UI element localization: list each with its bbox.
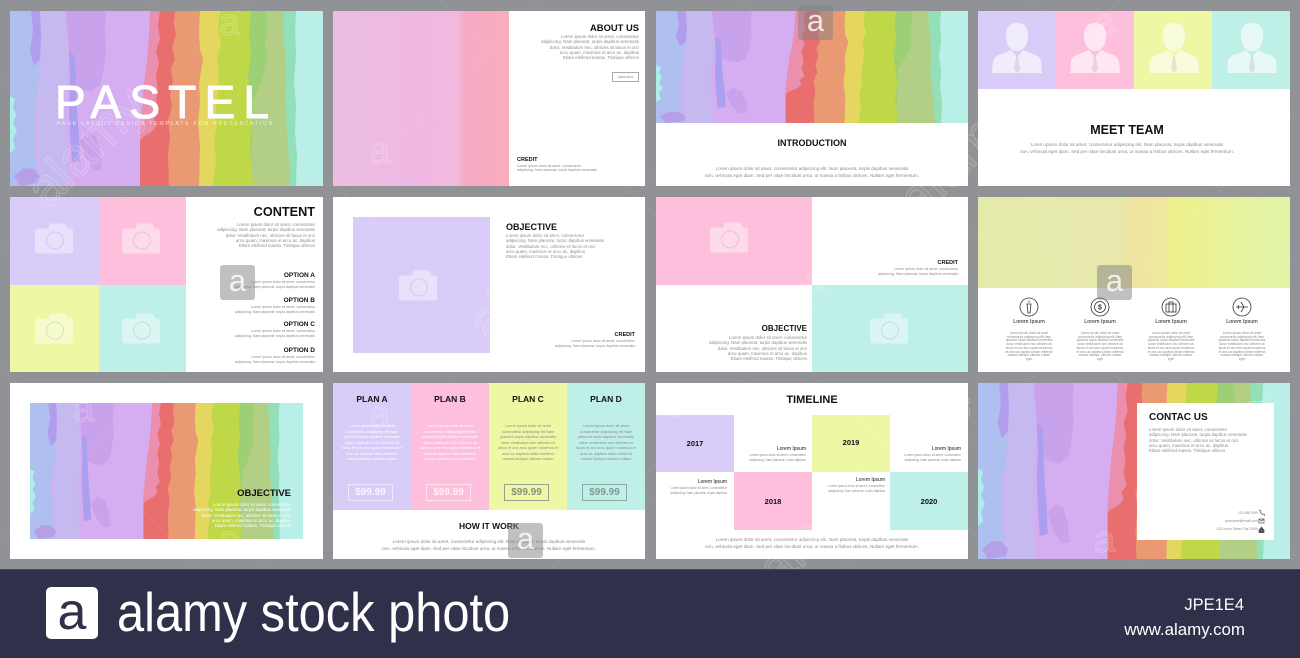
plan name: PLAN C: [512, 394, 544, 404]
heading: about us: ABOUT US: [590, 22, 639, 33]
pink watercolor panel: [333, 11, 509, 186]
option A: Lorem ipsum dolor sit amet, consectetur: [251, 280, 315, 284]
contact details: [1216, 511, 1258, 531]
contact icons: [1258, 510, 1265, 533]
credit: Lorem ipsum dolor sit amet, consectetur: [571, 339, 635, 343]
credit: adipiscing. Nam placerat, turpis dapibus venenatis: [878, 272, 958, 276]
body text: dolor. Vestibulum nec, ultricies sit lacus et orci: [506, 244, 595, 249]
option D: Lorem ipsum dolor sit amet, consectetur: [251, 355, 315, 359]
body text: adipiscing. Nam placerat, turpis dapibus venenatis: [217, 227, 315, 232]
watercolor image: [30, 403, 303, 539]
plan text: Lorem ipsum dolor sit amet consectetur adipiscing elit Nam placerat turpis dapibus venenatis dolor vestibulum nec ultricies sit lacus et orci arcu quam maximus et arcu ac dapibus etiam eleifend massa tristique ultrices nullam: [498, 424, 558, 461]
timeline note 2020: adipiscing. Nam placerat, turpis dapibus: [828, 489, 885, 493]
credit: Lorem ipsum dolor sit amet, consectetur: [517, 164, 581, 168]
watermark: alamy logos and marks: a: [804, 260, 825, 302]
subtitle: PAGE LAYOUT DESIGN TEMPLATE FOR PRESENTATION: [57, 121, 274, 127]
contact card: [1137, 403, 1274, 540]
price: [426, 484, 471, 501]
credit: CREDIT: [517, 157, 537, 163]
icon column 1: [1006, 298, 1052, 361]
watermark: alamy logos and marks: alamy: [14, 75, 158, 219]
watercolor image: [978, 383, 1290, 559]
slide: Meet team: [978, 11, 1290, 186]
timeline note 2017: [749, 446, 806, 462]
credit: CREDIT: [938, 260, 958, 266]
timeline note 2017: Lorem ipsum dolor sit amet, consectetur: [749, 453, 806, 457]
plan name: PLAN B: [434, 394, 466, 404]
plan text: Lorem ipsum dolor sit amet consectetur adipiscing elit Nam placerat turpis dapibus venenatis dolor vestibulum nec ultricies sit lacus et orci arcu quam maximus et arcu ac dapibus etiam eleifend massa tristique ultrices nullam: [342, 424, 402, 461]
label: Lorem Ipsum: [1155, 319, 1187, 325]
year tile 2018: [734, 472, 812, 530]
body text: Lorem ipsum dolor sit amet consectetur adipiscing elit Nam placerat turpis dapibus venenatis dolor vestibulum nec ultricies sit lacus et orci arcu quam maximus et arcu ac dapibus etiam eleifend massa tristique ultrices nullam eget: [1006, 331, 1052, 361]
body text: Etiam eleifend massa. Tristique ultrices: [239, 243, 315, 248]
year tile 2017: [656, 415, 734, 472]
slide: Content: [10, 197, 323, 372]
body text: dolor. Vestibulum nec, ultricies sit lacus et orci: [202, 513, 291, 518]
slide: Contact us: [978, 383, 1290, 559]
watermark: alamy logos and marks: a: [1234, 398, 1276, 420]
watermark: alamy logos and marks: a: [1234, 140, 1276, 162]
option C: Lorem ipsum dolor sit amet, consectetur: [251, 329, 315, 333]
timeline note 2018: adipiscing. Nam placerat, turpis dapibus: [670, 491, 727, 495]
slide: About us: [333, 11, 645, 186]
logo tile: [46, 587, 98, 639]
button: VIEW INFO: [618, 75, 633, 79]
image tile mint: [812, 285, 968, 372]
watermark: alamy logos and marks: alamy: [886, 85, 1030, 229]
contact details: yourname@email.com: [1225, 519, 1258, 523]
body text: [705, 166, 919, 178]
watermark: alamy logos and marks: a: [1087, 0, 1122, 46]
body text: arcu quam, maximus et arcu ac, dapibus: [212, 518, 291, 523]
body text: [506, 233, 604, 259]
body text: Lorem ipsum dolor sit amet, consectetur: [1149, 427, 1227, 432]
body text: dolor. Vestibulum nec, ultricies sit lacus et orci: [550, 45, 639, 50]
body text: adipiscing. Nam placerat, turpis dapibus venenatis: [541, 39, 639, 44]
wordmark: alamy stock photo: [117, 581, 510, 643]
body text: dolor. Vestibulum nec, ultricies sit lacus et orci: [226, 233, 315, 238]
body text: Lorem ipsum dolor sit amet consectetur adipiscing elit Nam placerat turpis dapibus venenatis dolor vestibulum nec ultricies sit lacus et orci arcu quam maximus et arcu ac dapibus etiam eleifend massa tristique ultrices nullam eget: [1219, 331, 1265, 361]
icon column 4: [1218, 298, 1266, 361]
slide: Objective with two images: [656, 197, 968, 372]
body text: adipiscing. Nam placerat, turpis dapibus venenatis: [506, 238, 604, 243]
icon column 2: [1076, 298, 1124, 361]
heading: contac us: CONTAC US: [1149, 412, 1208, 423]
year tile 2019: 2019: [843, 438, 859, 447]
image tile lavender: [353, 217, 490, 353]
credit: Lorem ipsum dolor sit amet, consectetur: [894, 267, 958, 271]
footer bar: [0, 569, 1300, 658]
price: $99.99: [355, 487, 386, 498]
year tile 2019: [812, 415, 890, 472]
label: Lorem Ipsum: [1084, 319, 1116, 325]
body text: non, vehicula eget diam. Sed per vitae tincidunt urna, ut massa a finibus ultrices. Nullam eget fermentum.: [1020, 149, 1234, 154]
timeline note 2019: Lorem ipsum dolor sit amet, consectetur: [904, 453, 961, 457]
option A: [235, 272, 315, 289]
body text: dolor. Vestibulum nec, ultricies sit lacus et orci: [718, 346, 807, 351]
label: Lorem Ipsum: [1226, 319, 1258, 325]
body text: [1149, 427, 1247, 453]
plan D column: [567, 383, 645, 510]
slide: Timeline: [656, 383, 968, 559]
credit: [878, 260, 958, 276]
body text: Etiam eleifend massa. Tristique ultrices: [506, 254, 582, 259]
logo tile: a: [58, 583, 86, 641]
icon: dollar coin: $: [1098, 304, 1102, 311]
image tile yellow: [10, 285, 99, 372]
price: $99.99: [433, 487, 464, 498]
heading: objective: OBJECTIVE: [506, 222, 557, 232]
plan text: Lorem ipsum dolor sit amet consectetur adipiscing elit Nam placerat turpis dapibus venenatis dolor vestibulum nec ultricies sit lacus et orci arcu quam maximus et arcu ac dapibus etiam eleifend massa tristique ultrices nullam: [420, 424, 480, 461]
slide: Introduction: [656, 11, 968, 186]
body text: Lorem ipsum dolor sit amet, consectetur adipiscing elit. Nam placerat, turpis dapibus venenatis: [716, 537, 908, 542]
option C: adipiscing. Nam placerat, turpis dapibus venenatis: [235, 334, 315, 338]
plan A column: [333, 383, 411, 510]
timeline note 2019: adipiscing. Nam placerat, turpis dapibus: [904, 458, 961, 462]
watermark: alamy logos and marks: a: [647, 140, 689, 162]
timeline note 2018: Lorem ipsum dolor sit amet, consectetur: [670, 486, 727, 490]
option D: adipiscing. Nam placerat, turpis dapibus venenatis: [235, 360, 315, 364]
team tile 2: [1056, 11, 1134, 89]
plan text: Lorem ipsum dolor sit amet consectetur adipiscing elit Nam placerat turpis dapibus venenatis dolor vestibulum nec ultricies sit lacus et orci arcu quam maximus et arcu ac dapibus etiam eleifend massa tristique ultrices nullam: [576, 424, 636, 461]
body text: dolor. Vestibulum nec, ultricies sit lacus et orci: [1149, 438, 1238, 443]
body text: arcu quam, maximus et arcu ac, dapibus: [728, 351, 807, 356]
label: Lorem Ipsum: [1013, 319, 1045, 325]
option B: Lorem ipsum dolor sit amet, consectetur: [251, 305, 315, 309]
watermark: alamy logos and marks: a: [647, 397, 689, 419]
watermark: alamy logos and marks: a: [807, 3, 824, 38]
year tile 2018: 2018: [765, 497, 781, 506]
body text: Etiam eleifend massa. Tristique ultrices: [563, 55, 639, 60]
timeline note 2018: Lorem Ipsum: [698, 479, 727, 485]
price: [504, 484, 549, 501]
body text: Lorem ipsum dolor sit amet, consectetur: [729, 335, 807, 340]
credit: CREDIT: [615, 332, 635, 338]
team tile 3: [1134, 11, 1212, 89]
body text: Lorem ipsum dolor sit amet, consectetur adipiscing elit. Nam placerat, turpis dapibus venenatis: [393, 539, 585, 544]
body text: adipiscing. Nam placerat, turpis dapibus venenatis: [1149, 432, 1247, 437]
price: $99.99: [511, 487, 542, 498]
body text: Lorem ipsum dolor sit amet, consectetur: [213, 502, 291, 507]
price: [582, 484, 627, 501]
option D: [235, 347, 315, 364]
watermark: alamy logos and marks: a: [219, 2, 240, 44]
body text: non, vehicula eget diam. Sed per vitae tincidunt urna, ut massa a finibus ultrices. Nullam eget fermentum.: [705, 544, 919, 549]
heading: how it work: HOW IT WORK: [459, 521, 519, 531]
option D: OPTION D: [284, 347, 315, 354]
credit: adipiscing. Nam placerat, turpis dapibus venenatis: [517, 168, 597, 172]
timeline note 2017: Lorem Ipsum: [777, 446, 806, 452]
watermark: alamy logos and marks: a: [1094, 519, 1115, 561]
icon: person: [1020, 298, 1038, 316]
credit: adipiscing. Nam placerat, turpis dapibus venenatis: [555, 344, 635, 348]
body text: arcu quam, maximus et arcu ac, dapibus: [560, 50, 639, 55]
slide: Objective on watercolor: [10, 383, 323, 559]
icon: airplane: [1232, 298, 1252, 316]
slide: Four icons: [978, 197, 1290, 372]
body text: Lorem ipsum dolor sit amet, consectetur: [506, 233, 584, 238]
option C: [235, 321, 315, 338]
price: [348, 484, 393, 501]
body text: [1020, 142, 1234, 154]
watercolor stripes: [10, 11, 323, 186]
credit: [517, 157, 597, 172]
watermark: alamy logos and marks: a: [369, 394, 390, 436]
slide: Plans: [333, 383, 645, 559]
body text: [217, 222, 315, 248]
icon column 3: [1148, 298, 1194, 361]
body text: non, vehicula eget diam. Sed per vitae tincidunt urna, ut massa a finibus ultrices. Nullam eget fermentum.: [382, 546, 596, 551]
credit: [555, 332, 635, 348]
watermark: alamy logos and marks: alamy: [456, 207, 600, 351]
body text: Etiam eleifend massa. Tristique ultrices: [215, 523, 291, 528]
image tile pink: [656, 197, 812, 285]
option B: adipiscing. Nam placerat, turpis dapibus venenatis: [235, 310, 315, 314]
body text: Lorem ipsum dolor sit amet consectetur adipiscing elit Nam placerat turpis dapibus venenatis dolor vestibulum nec ultricies sit lacus et orci arcu quam maximus et arcu ac dapibus etiam eleifend massa tristique ultrices nullam eget: [1077, 331, 1123, 361]
body text: adipiscing. Nam placerat, turpis dapibus venenatis: [709, 340, 807, 345]
timeline note 2019: [904, 446, 961, 462]
year tile 2017: 2017: [687, 439, 703, 448]
slide: Pastel cover: [10, 11, 323, 186]
yellow watercolor band: [978, 197, 1290, 288]
body text: Lorem ipsum dolor sit amet, consectetur: [561, 34, 639, 39]
heading: objective: OBJECTIVE: [762, 324, 807, 333]
option B: OPTION B: [284, 297, 315, 304]
timeline note 2020: Lorem Ipsum: [856, 477, 885, 483]
watermark: alamy logos and marks: a: [73, 388, 94, 430]
timeline note 2020: [828, 477, 885, 493]
body text: [705, 537, 919, 549]
watermark: alamy logos and marks: a: [229, 263, 246, 298]
watermark: alamy logos and marks: a: [1106, 263, 1123, 298]
title: PASTEL: PASTEL: [55, 76, 277, 128]
button: [612, 72, 639, 82]
body text: Lorem ipsum dolor sit amet, consectetur adipiscing elit. Nam placerat, turpis dapibus venenatis: [1031, 142, 1223, 147]
heading: introduction: INTRODUCTION: [778, 138, 846, 148]
watermark: alamy logos and marks: a: [514, 2, 535, 44]
icon: dollar coin: [1090, 298, 1110, 316]
team tile 1: [978, 11, 1056, 89]
watermark: alamy logos and marks: a: [937, 398, 979, 420]
body text: Lorem ipsum dolor sit amet, consectetur: [237, 222, 315, 227]
team tile 4: [1212, 11, 1290, 89]
plan B column: [411, 383, 489, 510]
image tile mint: [99, 285, 186, 372]
slide: Objective with square image: [333, 197, 645, 372]
icon: suitcase: [1162, 298, 1180, 316]
body text: arcu quam, maximus et arcu ac, dapibus: [236, 238, 315, 243]
image tile pink: [99, 197, 186, 285]
website: www.alamy.com: [1124, 620, 1245, 639]
year tile 2020: 2020: [921, 497, 937, 506]
image tile lavender: [10, 197, 99, 285]
timeline note 2018: [670, 479, 727, 495]
body text: adipiscing. Nam placerat, turpis dapibus venenatis: [193, 507, 291, 512]
image id: JPE1E4: [1184, 596, 1244, 614]
heading: meet team: MEET TEAM: [1090, 123, 1164, 137]
price: $99.99: [589, 487, 620, 498]
watermark: alamy logos and marks: a: [369, 130, 390, 172]
body text: [382, 539, 596, 551]
body text: [541, 34, 639, 60]
plan name: PLAN A: [356, 394, 388, 404]
plan C column: [489, 383, 567, 510]
option A: OPTION A: [284, 272, 315, 279]
watercolor band: [656, 11, 968, 123]
timeline note 2020: Lorem ipsum dolor sit amet, consectetur: [828, 484, 885, 488]
heading: objective: OBJECTIVE: [237, 488, 291, 499]
body text: [709, 335, 807, 361]
timeline note 2019: Lorem Ipsum: [932, 446, 961, 452]
option A: adipiscing. Nam placerat, turpis dapibus venenatis: [235, 285, 315, 289]
body text: Lorem ipsum dolor sit amet, consectetur adipiscing elit. Nam placerat, turpis dapibus venenatis: [716, 166, 908, 171]
body text: non, vehicula eget diam. Sed per vitae tincidunt urna, ut massa a finibus ultrices. Nullam eget fermentum.: [705, 173, 919, 178]
option B: [235, 297, 315, 314]
watermark: alamy logos and marks: a: [517, 521, 534, 556]
body text: [193, 502, 291, 528]
body text: arcu quam, maximus et arcu ac, dapibus: [1149, 443, 1228, 448]
body text: Etiam eleifend massa. Tristique ultrices: [731, 356, 807, 361]
body text: Lorem ipsum dolor sit amet consectetur adipiscing elit Nam placerat turpis dapibus venenatis dolor vestibulum nec ultricies sit lacus et orci arcu quam maximus et arcu ac dapibus etiam eleifend massa tristique ultrices nullam eget: [1148, 331, 1194, 361]
heading: timeline: TIMELINE: [786, 394, 838, 406]
option C: OPTION C: [284, 321, 315, 328]
body text: Etiam eleifend massa. Tristique ultrices: [1149, 448, 1225, 453]
contact details: 123 Lorem Street City 11900: [1216, 527, 1258, 531]
contact details: 123 456 7890: [1238, 511, 1258, 515]
heading: content: CONTENT: [254, 205, 315, 219]
plan name: PLAN D: [590, 394, 622, 404]
timeline note 2017: adipiscing. Nam placerat, turpis dapibus: [749, 458, 806, 462]
body text: arcu quam, maximus et arcu ac, dapibus: [506, 249, 585, 254]
watermark: alamy logos and marks: a: [219, 519, 240, 561]
year tile 2020: [890, 472, 968, 530]
